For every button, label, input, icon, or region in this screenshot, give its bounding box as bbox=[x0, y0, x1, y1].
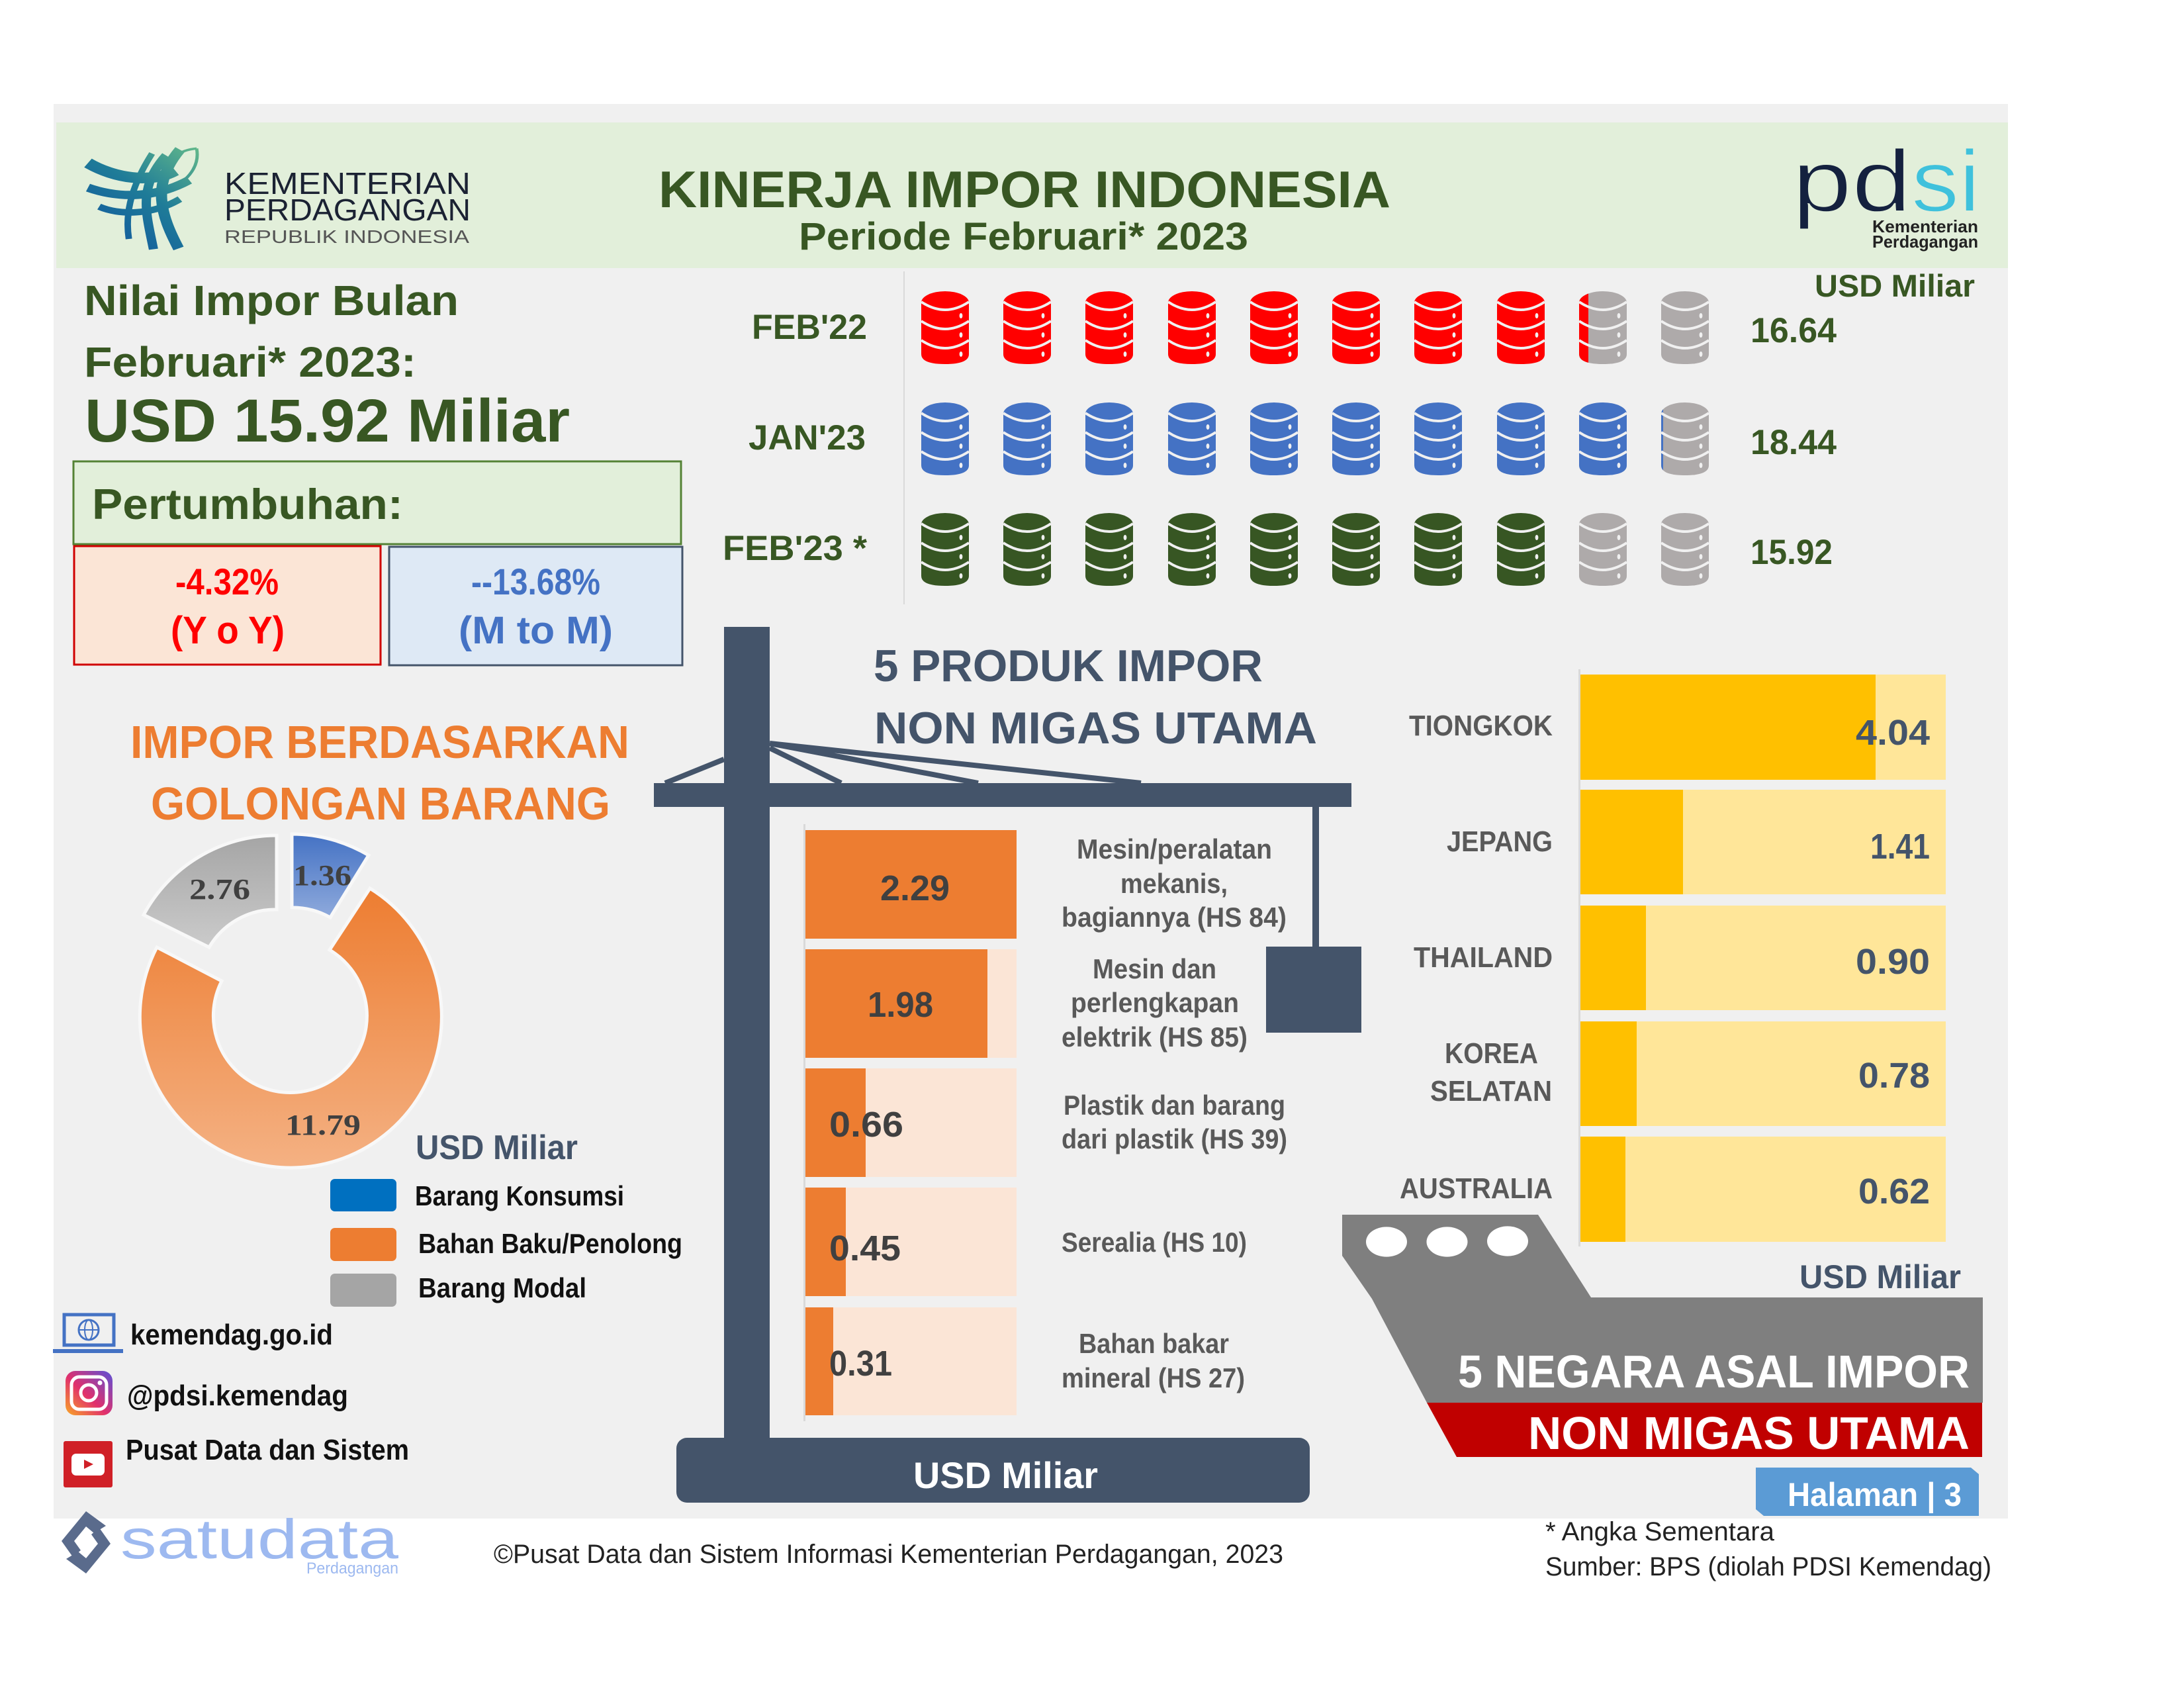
legend: Bahan Baku/Penolong bbox=[418, 1228, 682, 1259]
bar: HS 85: perlengkapan bbox=[1071, 987, 1239, 1018]
bar chart: top origin countries bbox=[1400, 669, 1946, 1246]
row: Feb 2023: FEB'23 * bbox=[723, 529, 867, 568]
contact: website: kemendag.go.id bbox=[130, 1319, 333, 1351]
contact: youtube bbox=[64, 1434, 409, 1487]
crane illustration bbox=[654, 627, 1361, 1503]
crane base label: USD Miliar bbox=[913, 1454, 1098, 1496]
heading: top products: 5 PRODUK IMPOR bbox=[874, 641, 1263, 691]
PDSI logo bbox=[1792, 132, 1980, 252]
bar: Jepang: 1.41 bbox=[1870, 827, 1930, 867]
bar: HS 10: Serealia (HS 10) bbox=[1062, 1227, 1247, 1258]
header band bbox=[56, 122, 2008, 268]
ministry name: KEMENTERIAN bbox=[224, 166, 471, 201]
icon: laptop bbox=[53, 1315, 123, 1351]
bar: Thailand: THAILAND bbox=[1414, 941, 1553, 974]
bar: HS 27 bbox=[805, 1307, 1245, 1415]
bar: HS 84: Mesin/peralatan bbox=[1077, 833, 1272, 865]
bar: HS 39: 0.66 bbox=[829, 1105, 903, 1145]
bar: HS 85 bbox=[805, 949, 1248, 1058]
bar: HS 84 bbox=[805, 830, 1287, 939]
panel: pertumbuhan: Pertumbuhan: bbox=[92, 480, 403, 528]
source note bbox=[1545, 1517, 1991, 1581]
panel: month to month growth: --13.68% bbox=[471, 561, 600, 602]
donut chart: 1.36 bbox=[293, 859, 351, 892]
bar: HS 84: 2.29 bbox=[880, 868, 950, 908]
icon: youtube bbox=[64, 1441, 113, 1487]
PDSI logo: pd bbox=[1792, 132, 1911, 230]
bar: HS 27: 0.31 bbox=[829, 1344, 892, 1383]
row: Feb 2022: 16.64 bbox=[1751, 311, 1837, 350]
legend bbox=[330, 1129, 682, 1307]
bar: Korea Selatan: SELATAN bbox=[1430, 1075, 1552, 1107]
panel: year on year growth: (Y o Y) bbox=[171, 609, 285, 652]
row: Jan 2023: JAN'23 bbox=[749, 418, 866, 457]
panel: month to month growth bbox=[389, 547, 682, 665]
bar: HS 85: elektrik (HS 85) bbox=[1062, 1021, 1248, 1053]
panel: month to month growth: (M to M) bbox=[459, 609, 613, 652]
bar: Jepang bbox=[1447, 790, 1946, 894]
contact: website bbox=[53, 1315, 333, 1351]
bar: Korea Selatan: 0.78 bbox=[1858, 1056, 1930, 1096]
ship illustration with heading: 5 NEGARA ASAL IMPOR bbox=[1458, 1346, 1970, 1397]
row: Feb 2023 bbox=[723, 513, 1833, 586]
bar: HS 84: bagiannya (HS 84) bbox=[1062, 902, 1287, 933]
bar: HS 85: 1.98 bbox=[868, 985, 933, 1025]
headline value block: USD 15.92 Miliar bbox=[85, 387, 570, 455]
bar chart: top products bbox=[803, 824, 1287, 1421]
bar: Tiongkok: TIONGKOK bbox=[1409, 710, 1553, 742]
page tab bbox=[1756, 1468, 1979, 1516]
ministry name bbox=[224, 166, 471, 247]
legend: USD Miliar bbox=[416, 1129, 578, 1167]
icon: satudata mark bbox=[62, 1511, 111, 1573]
bar: Thailand bbox=[1414, 906, 1946, 1010]
donut chart bbox=[140, 834, 441, 1168]
bar: Korea Selatan bbox=[1430, 1021, 1946, 1126]
title: Periode Februari* 2023 bbox=[799, 215, 1248, 258]
satudata logo: Perdagangan bbox=[306, 1560, 398, 1577]
heading: top products: NON MIGAS UTAMA bbox=[874, 703, 1317, 753]
bar: Australia: AUSTRALIA bbox=[1400, 1172, 1553, 1205]
copyright: ©Pusat Data dan Sistem Informasi Kementerian Perdagangan, 2023 bbox=[494, 1540, 1283, 1569]
source note: Sumber: BPS (diolah PDSI Kemendag) bbox=[1545, 1552, 1991, 1581]
headline value block: Februari* 2023: bbox=[84, 338, 416, 386]
contact: youtube: Pusat Data dan Sistem bbox=[126, 1434, 409, 1466]
heading: imports by goods class: IMPOR BERDASARKAN bbox=[130, 716, 629, 768]
bar: HS 39: Plastik dan barang bbox=[1064, 1090, 1285, 1121]
bar: HS 10: 0.45 bbox=[829, 1229, 901, 1268]
heading: imports by goods class: GOLONGAN BARANG bbox=[151, 778, 610, 829]
heading: top products bbox=[874, 641, 1317, 753]
legend: Barang Modal bbox=[418, 1272, 586, 1303]
PDSI logo: si bbox=[1911, 132, 1980, 230]
ship illustration with heading: NON MIGAS UTAMA bbox=[1528, 1407, 1970, 1459]
PDSI logo: Perdagangan bbox=[1872, 232, 1978, 252]
title bbox=[659, 160, 1390, 258]
donut chart: 2.76 bbox=[189, 873, 250, 906]
bar: Korea Selatan: KOREA bbox=[1445, 1037, 1538, 1070]
icon: instagram bbox=[66, 1371, 113, 1415]
bar: Thailand: 0.90 bbox=[1856, 942, 1930, 982]
row: Jan 2023: 18.44 bbox=[1751, 423, 1837, 462]
panel: pertumbuhan bbox=[73, 461, 681, 544]
bar: HS 10 bbox=[805, 1188, 1247, 1296]
heading: imports by goods class bbox=[130, 716, 629, 829]
row: Jan 2023 bbox=[749, 402, 1837, 475]
headline value block: Nilai Impor Bulan bbox=[84, 277, 459, 324]
barrel chart: import value by period bbox=[723, 268, 1975, 604]
bar: HS 39 bbox=[805, 1068, 1287, 1177]
legend: Barang Konsumsi bbox=[415, 1180, 624, 1211]
headline value block bbox=[84, 277, 570, 455]
title: KINERJA IMPOR INDONESIA bbox=[659, 160, 1390, 218]
panel: year on year growth bbox=[74, 546, 381, 665]
source note: * Angka Sementara bbox=[1545, 1517, 1775, 1546]
bar: HS 27: Bahan bakar bbox=[1079, 1328, 1229, 1359]
row: Feb 2023: 15.92 bbox=[1751, 533, 1833, 572]
row: Feb 2022: FEB'22 bbox=[752, 308, 867, 347]
panel: year on year growth: -4.32% bbox=[175, 561, 279, 602]
bar: HS 27: mineral (HS 27) bbox=[1062, 1362, 1245, 1393]
page tab: Halaman | 3 bbox=[1788, 1476, 1962, 1514]
bar: HS 84: mekanis, bbox=[1120, 868, 1228, 899]
ship illustration with heading bbox=[1342, 1215, 1983, 1459]
ministry name: PERDAGANGAN bbox=[224, 193, 471, 227]
donut chart: 11.79 bbox=[285, 1109, 361, 1141]
contact: instagram: @pdsi.kemendag bbox=[127, 1380, 348, 1412]
bar: Tiongkok bbox=[1409, 675, 1946, 780]
row: Feb 2022 bbox=[752, 291, 1837, 364]
bar: Australia: 0.62 bbox=[1858, 1172, 1930, 1211]
PDSI logo: Kementerian bbox=[1872, 216, 1978, 236]
ministry name: REPUBLIK INDONESIA bbox=[224, 226, 469, 247]
background panel bbox=[54, 104, 2008, 1519]
bar: HS 85: Mesin dan bbox=[1093, 953, 1216, 984]
unit label: USD Miliar bbox=[1815, 268, 1975, 303]
bar: Jepang: JEPANG bbox=[1447, 825, 1553, 858]
contact: instagram bbox=[66, 1371, 348, 1415]
bar: Tiongkok: 4.04 bbox=[1856, 713, 1930, 753]
bar: HS 39: dari plastik (HS 39) bbox=[1062, 1123, 1287, 1154]
unit label: countries: USD Miliar bbox=[1799, 1258, 1961, 1295]
icon: Kementerian Perdagangan logo mark bbox=[88, 148, 197, 249]
bar: Australia bbox=[1400, 1137, 1946, 1242]
satudata logo bbox=[62, 1508, 398, 1577]
satudata logo: satudata bbox=[120, 1508, 398, 1570]
